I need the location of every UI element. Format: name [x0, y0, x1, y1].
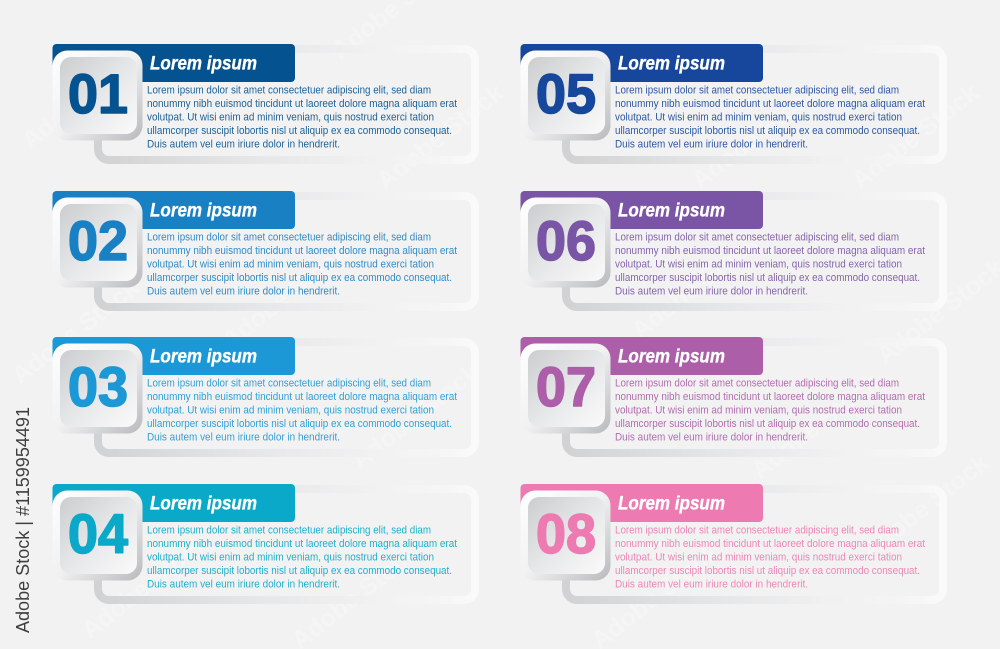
panel: item 07: nonummy nibh euismod tincidunt ut laoreet dolore magna aliquam erat [615, 391, 925, 403]
watermark: Adobe Stock [346, 359, 484, 475]
panel: item 08: 08 [536, 502, 596, 565]
panel: item 04 [52, 484, 475, 600]
panel: item 06: ullamcorper suscipit lobortis nisl ut aliquip ex ea commodo consequat. [615, 272, 920, 284]
panel: item 05: Lorem ipsum [618, 54, 725, 74]
panel: item 03 [52, 337, 475, 453]
panel: item 02: Lorem ipsum [150, 200, 257, 222]
panel: item 03: Duis autem vel eum iriure dolor in hendrerit. [147, 432, 340, 444]
panel: item 02: Duis autem vel eum iriure dolor in hendrerit. [147, 286, 340, 298]
panel: item 01 [52, 44, 475, 160]
panel: item 06: volutpat. Ut wisi enim ad minim veniam, quis nostrud exerci tation [615, 258, 902, 270]
panel: item 04: Duis autem vel eum iriure dolor in hendrerit. [147, 578, 340, 590]
panel: item 08: ullamcorper suscipit lobortis nisl ut aliquip ex ea commodo consequat. [615, 565, 920, 577]
panel: item 01: nonummy nibh euismod tincidunt ut laoreet dolore magna aliquam erat [147, 98, 457, 110]
panel: item 08: Lorem ipsum dolor sit amet consectetuer adipiscing elit, sed diam [615, 524, 899, 536]
panel: item 07: ullamcorper suscipit lobortis nisl ut aliquip ex ea commodo consequat. [615, 418, 920, 430]
watermark: Adobe Stock [76, 529, 214, 645]
panel: item 03: 03 [68, 355, 128, 418]
panel: item 05: 05 [536, 62, 596, 125]
watermark: Adobe Stock [856, 449, 994, 565]
stock id label: Adobe Stock | #1159954491 [13, 407, 33, 633]
panel: item 01: ullamcorper suscipit lobortis nisl ut aliquip ex ea commodo consequat. [147, 125, 452, 137]
panel: item 08: nonummy nibh euismod tincidunt ut laoreet dolore magna aliquam erat [615, 538, 925, 550]
panel: item 02: volutpat. Ut wisi enim ad minim veniam, quis nostrud exerci tation [147, 258, 434, 270]
panel: item 05: Duis autem vel eum iriure dolor in hendrerit. [615, 138, 808, 150]
panel: item 08: Duis autem vel eum iriure dolor in hendrerit. [615, 578, 808, 590]
panel: item 01: 01 [68, 62, 128, 125]
panel: item 07: 07 [536, 355, 596, 418]
panel: item 01: Lorem ipsum [150, 54, 257, 74]
panel: item 03: Lorem ipsum [150, 346, 257, 368]
panel: item 08: Lorem ipsum [618, 494, 725, 514]
panel: item 01: Lorem ipsum dolor sit amet consectetuer adipiscing elit, sed diam [147, 84, 431, 96]
panel: item 01: volutpat. Ut wisi enim ad minim veniam, quis nostrud exerci tation [147, 112, 434, 124]
panel: item 06: Lorem ipsum [618, 200, 725, 222]
panel: item 04: ullamcorper suscipit lobortis nisl ut aliquip ex ea commodo consequat. [147, 565, 452, 577]
panel: item 07: volutpat. Ut wisi enim ad minim veniam, quis nostrud exerci tation [615, 404, 902, 416]
watermark: Adobe Stock [16, 39, 154, 155]
panel: item 07: Lorem ipsum [618, 346, 725, 368]
panel: item 03: Lorem ipsum dolor sit amet consectetuer adipiscing elit, sed diam [147, 378, 431, 390]
panel: item 03: volutpat. Ut wisi enim ad minim veniam, quis nostrud exerci tation [147, 404, 434, 416]
panel: item 03: ullamcorper suscipit lobortis nisl ut aliquip ex ea commodo consequat. [147, 418, 452, 430]
panel: item 04: Lorem ipsum [150, 494, 257, 514]
watermark: Adobe Stock [216, 239, 354, 355]
panel: item 07: Duis autem vel eum iriure dolor in hendrerit. [615, 432, 808, 444]
panel: item 03: nonummy nibh euismod tincidunt ut laoreet dolore magna aliquam erat [147, 391, 457, 403]
panel: item 06: nonummy nibh euismod tincidunt ut laoreet dolore magna aliquam erat [615, 245, 925, 257]
panel: item 05: ullamcorper suscipit lobortis nisl ut aliquip ex ea commodo consequat. [615, 125, 920, 137]
panel: item 05 [520, 44, 943, 160]
panel: item 06: Lorem ipsum dolor sit amet consectetuer adipiscing elit, sed diam [615, 232, 899, 244]
panel: item 02: ullamcorper suscipit lobortis nisl ut aliquip ex ea commodo consequat. [147, 272, 452, 284]
panel: item 05: nonummy nibh euismod tincidunt ut laoreet dolore magna aliquam erat [615, 98, 925, 110]
panel: item 06 [520, 191, 943, 307]
watermark: Adobe Stock [6, 274, 144, 390]
panel: item 06: Duis autem vel eum iriure dolor in hendrerit. [615, 286, 808, 298]
panel: item 08 [520, 484, 943, 600]
panel: item 08: volutpat. Ut wisi enim ad minim veniam, quis nostrud exerci tation [615, 552, 902, 564]
panel: item 04: volutpat. Ut wisi enim ad minim veniam, quis nostrud exerci tation [147, 552, 434, 564]
watermark: Adobe Stock [846, 79, 984, 195]
panel: item 04: Lorem ipsum dolor sit amet consectetuer adipiscing elit, sed diam [147, 524, 431, 536]
panel: item 05: volutpat. Ut wisi enim ad minim veniam, quis nostrud exerci tation [615, 112, 902, 124]
watermark: Adobe Stock [371, 79, 509, 195]
panel: item 01: Duis autem vel eum iriure dolor in hendrerit. [147, 138, 340, 150]
panel: item 02: Lorem ipsum dolor sit amet consectetuer adipiscing elit, sed diam [147, 232, 431, 244]
panel: item 06: 06 [536, 209, 596, 272]
panel: item 04: nonummy nibh euismod tincidunt ut laoreet dolore magna aliquam erat [147, 538, 457, 550]
watermark: Adobe Stock [626, 229, 764, 345]
watermark: Adobe Stock [686, 79, 824, 195]
watermark: Adobe Stock [746, 369, 884, 485]
panel: item 04: 04 [68, 502, 128, 565]
panel: item 02 [52, 191, 475, 307]
panel: item 05: Lorem ipsum dolor sit amet consectetuer adipiscing elit, sed diam [615, 84, 899, 96]
panel: item 07 [520, 337, 943, 453]
panel: item 02: nonummy nibh euismod tincidunt ut laoreet dolore magna aliquam erat [147, 245, 457, 257]
panel: item 07: Lorem ipsum dolor sit amet consectetuer adipiscing elit, sed diam [615, 378, 899, 390]
panel: item 02: 02 [68, 209, 128, 272]
